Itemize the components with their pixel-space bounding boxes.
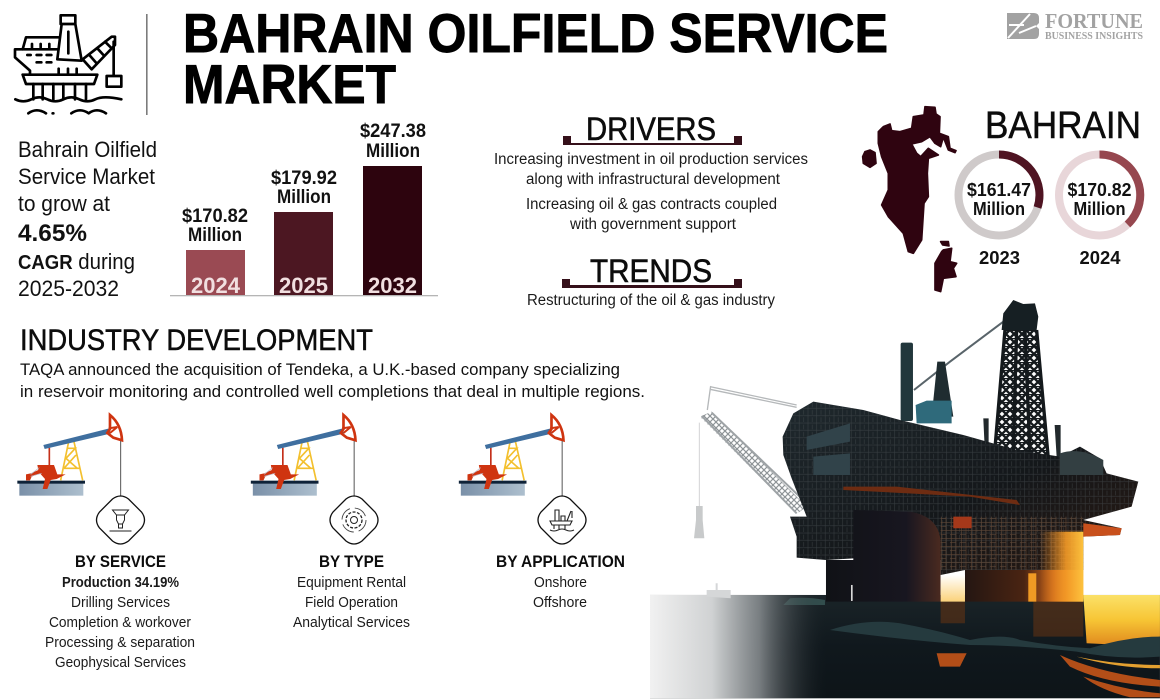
- bar: 2025: $179.92: [271, 168, 337, 189]
- segment: by service: Production 34.19%: [62, 575, 179, 591]
- text block: drivers: Increasing investment in oil production services: [494, 151, 808, 168]
- bar chart: [170, 121, 438, 298]
- segment: by application: BY APPLICATION: [496, 552, 625, 571]
- flare stack and cable: [901, 302, 1013, 423]
- sun glow: [1040, 532, 1083, 602]
- segment: by service: Completion & workover: [49, 615, 191, 631]
- bar: 2024: [182, 206, 248, 298]
- segment: by application: [496, 552, 625, 611]
- platform deck: [783, 402, 1138, 575]
- logo: Fortune Business Insights: BUSINESS INSIGHTS: [1045, 31, 1143, 42]
- sea: [650, 583, 1160, 698]
- drilling tower: [983, 300, 1061, 458]
- columns: [826, 510, 1083, 602]
- heading: trends: TRENDS: [590, 253, 712, 289]
- illustration: offshore oil rig at sunset: [650, 300, 1160, 698]
- segment: by service: Drilling Services: [71, 595, 170, 611]
- text block: market growth summary: 2025-2032: [18, 276, 119, 301]
- text block: market growth summary: to grow at: [18, 191, 110, 216]
- segment: by type: BY TYPE: [319, 552, 384, 571]
- bar: 2032: [360, 121, 426, 298]
- icon: pump jack, by service: [17, 415, 122, 497]
- donut: 2023: Million: [973, 199, 1025, 219]
- donut: 2024: [1059, 154, 1140, 268]
- icon: type diamond: [330, 496, 378, 544]
- segment: by type: [293, 552, 410, 631]
- bar: 2024: 2024: [191, 273, 241, 298]
- segment: by service: [45, 552, 195, 671]
- donut: 2024: Million: [1074, 199, 1126, 219]
- segment: by type: Equipment Rental: [297, 575, 406, 591]
- text block: trends: Restructuring of the oil & gas industry: [527, 292, 775, 309]
- icon: application diamond: [538, 496, 586, 544]
- icon: pump jack, by application: [459, 415, 563, 497]
- bar: 2025: 2025: [279, 273, 328, 298]
- donut: 2023: [958, 154, 1040, 268]
- donut: 2023: 2023: [979, 248, 1020, 268]
- bar: 2025: Million: [277, 187, 331, 208]
- text block: drivers: along with infrastructural development: [526, 171, 781, 188]
- text block: industry development: in reservoir monitoring and controlled well completions that deal in multiple regions.: [20, 382, 645, 401]
- text block: drivers: [494, 151, 808, 233]
- heading: drivers: DRIVERS: [586, 111, 716, 147]
- bar: 2032: 2032: [368, 273, 417, 298]
- crane: [694, 386, 807, 538]
- logo: Fortune Business Insights: FORTUNE: [1045, 9, 1143, 33]
- heading: Bahrain: BAHRAIN: [985, 105, 1141, 147]
- text block: market growth summary: [18, 137, 157, 301]
- bar: 2025: [271, 168, 337, 298]
- bar: 2032: Million: [366, 141, 420, 162]
- segment: by application: Onshore: [534, 575, 587, 591]
- icon: pump jack, by type: [251, 415, 355, 497]
- donut: 2024: 2024: [1080, 248, 1120, 268]
- donut: 2023: $161.47: [967, 180, 1031, 200]
- text block: market growth summary: Service Market: [18, 164, 155, 189]
- title: [183, 2, 888, 115]
- bar: 2032: $247.38: [360, 121, 426, 142]
- icon: offshore platform: [15, 15, 121, 113]
- logo: Fortune Business Insights: [1007, 9, 1143, 42]
- donut: 2024: $170.82: [1068, 180, 1132, 200]
- bar: 2024: $170.82: [182, 206, 248, 227]
- icon: service diamond: [96, 496, 144, 544]
- segment: by service: Geophysical Services: [55, 655, 186, 671]
- segment: by type: Field Operation: [305, 595, 398, 611]
- heading: industry development: INDUSTRY DEVELOPMENT: [20, 324, 373, 357]
- title: MARKET: [183, 53, 396, 115]
- segment: by type: Analytical Services: [293, 615, 410, 631]
- text block: drivers: with government support: [569, 216, 737, 233]
- segment: by application: Offshore: [533, 595, 587, 611]
- text block: industry development: [20, 360, 645, 401]
- text block: market growth summary: CAGR during: [18, 249, 135, 274]
- bar: 2024: Million: [188, 225, 242, 246]
- divider: [146, 14, 148, 115]
- text block: market growth summary: Bahrain Oilfield: [18, 137, 157, 162]
- text block: drivers: Increasing oil & gas contracts coupled: [526, 196, 777, 213]
- title: BAHRAIN OILFIELD SERVICE: [183, 2, 888, 64]
- segment: by service: BY SERVICE: [75, 552, 166, 571]
- map of Bahrain: [863, 107, 957, 292]
- text block: industry development: TAQA announced the acquisition of Tendeka, a U.K.-based company specializing: [20, 360, 620, 379]
- text block: market growth summary: 4.65%: [18, 220, 87, 247]
- segment: by service: Processing & separation: [45, 635, 195, 651]
